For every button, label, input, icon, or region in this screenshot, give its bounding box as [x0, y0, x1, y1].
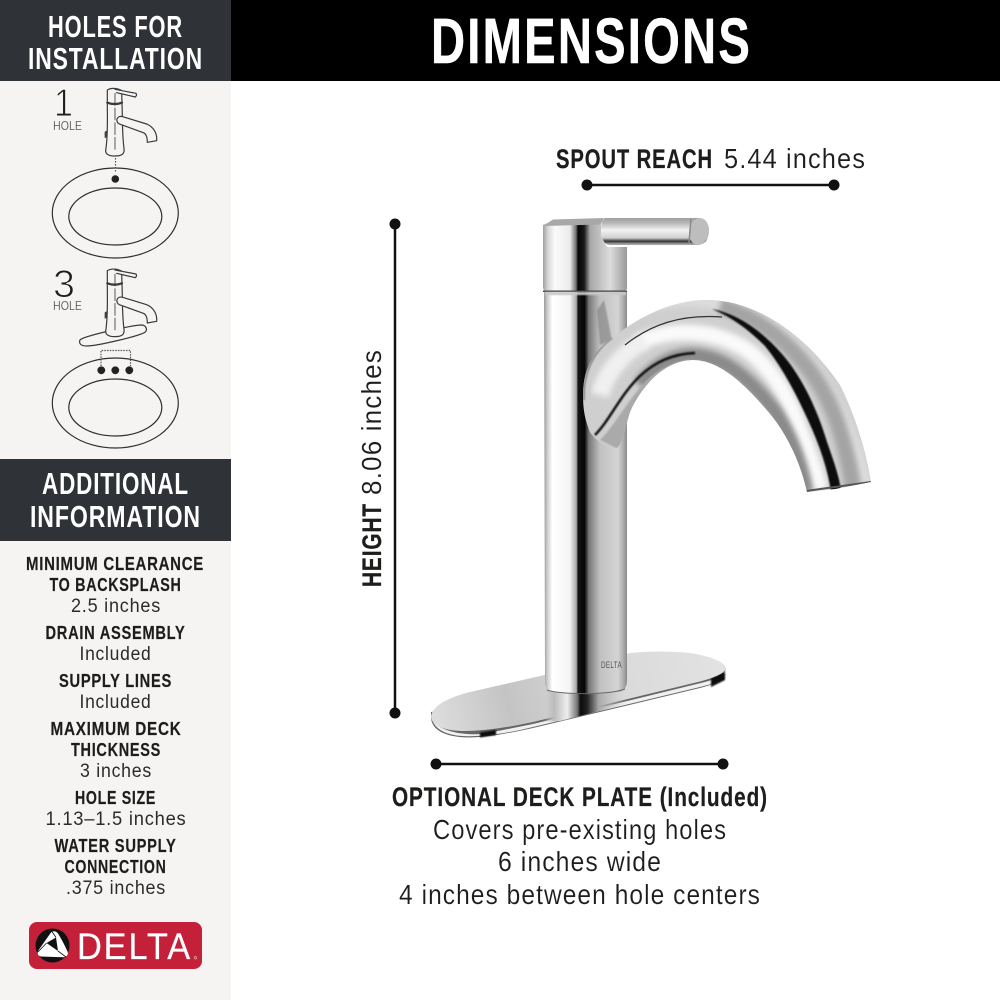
title banner: DIMENSIONS	[431, 5, 752, 77]
text block: supply lines: Included	[80, 692, 152, 713]
lower reflection line	[595, 353, 695, 435]
text block: optional deck plate: 4 inches between hole centers	[399, 879, 761, 910]
text block: maximum deck thickness: 3 inches	[80, 761, 152, 782]
image: chrome faucet	[431, 217, 880, 738]
faucet body	[544, 292, 627, 694]
heading: additional information	[0, 459, 231, 541]
text block: optional deck plate: 6 inches wide	[498, 846, 662, 877]
icon: sink single hole	[52, 158, 178, 258]
main dark stripe	[712, 309, 841, 492]
dimension: height: 8.06 inches	[356, 349, 387, 495]
text block: drain assembly: Included	[80, 644, 152, 665]
text block: hole size	[46, 787, 186, 830]
text block: drain assembly: DRAIN ASSEMBLY	[46, 622, 186, 643]
grey shoulder next to the dark stripe	[720, 306, 853, 490]
label: 1 hole: HOLE	[53, 119, 82, 133]
label: 1 hole: 1	[54, 82, 73, 125]
text block: minimum clearance: 2.5 inches	[71, 596, 161, 617]
text block: hole size: 1.13–1.5 inches	[46, 809, 186, 830]
text block: minimum clearance: TO BACKSPLASH	[50, 574, 182, 595]
dimension: spout reach: 5.44 inches	[724, 143, 866, 174]
heading: holes for installation: HOLES FOR	[48, 9, 183, 44]
lever handle	[601, 217, 711, 246]
text block: optional deck plate	[392, 782, 768, 910]
text block: maximum deck thickness	[50, 718, 182, 782]
heading: additional information: ADDITIONAL	[42, 466, 189, 501]
outer edge band	[670, 300, 870, 482]
text block: minimum clearance: MINIMUM CLEARANCE	[26, 553, 204, 574]
dimension: spout reach: SPOUT REACH	[556, 144, 713, 174]
icon: sink three holes	[52, 350, 178, 448]
text block: maximum deck thickness: MAXIMUM DECK	[50, 718, 182, 739]
mixer head	[543, 218, 627, 295]
spout nozzle	[806, 482, 871, 491]
sidebar background	[0, 0, 231, 1000]
text block: water supply connection: .375 inches	[66, 878, 166, 899]
heading: holes for installation	[0, 0, 231, 81]
text block: drain assembly	[46, 622, 186, 665]
label: 3 hole	[53, 263, 82, 313]
text block: maximum deck thickness: THICKNESS	[71, 739, 161, 760]
dimension: height: HEIGHT	[357, 503, 387, 587]
text block: water supply connection	[54, 835, 176, 899]
text block: minimum clearance	[26, 553, 204, 617]
text block: supply lines: SUPPLY LINES	[59, 670, 172, 691]
text block: supply lines	[59, 670, 172, 713]
deck plate	[431, 652, 726, 738]
heading: additional information: INFORMATION	[30, 499, 201, 534]
panel: 1 hole installation	[52, 82, 178, 258]
label: 3 hole: 3	[53, 263, 75, 306]
inner white highlight	[640, 333, 820, 490]
logo: Delta: DELTA	[77, 926, 192, 967]
icon: faucet with deck plate	[80, 269, 157, 346]
dimension: height	[356, 218, 400, 718]
text block: hole size: HOLE SIZE	[75, 787, 156, 808]
label: 1 hole	[53, 82, 82, 133]
text block: optional deck plate: OPTIONAL DECK PLATE (Included)	[392, 782, 768, 812]
heading: holes for installation: INSTALLATION	[28, 41, 203, 76]
dimension: spout reach	[556, 143, 866, 190]
grey inner edge	[640, 355, 806, 492]
panel: 3 hole installation	[52, 263, 178, 448]
faucet body: DELTA	[601, 660, 622, 671]
logo: Delta	[29, 922, 202, 969]
outer left edge	[584, 338, 612, 400]
text block: optional deck plate: Covers pre-existing holes	[433, 814, 727, 845]
text block: water supply connection: WATER SUPPLY	[54, 835, 176, 856]
upper reflection line	[625, 317, 722, 345]
spout	[583, 300, 871, 492]
label: 3 hole: HOLE	[53, 299, 82, 313]
text block: water supply connection: CONNECTION	[64, 856, 166, 877]
dimension: deck plate width	[430, 758, 728, 770]
title banner	[231, 0, 1000, 81]
icon: faucet single hole	[105, 88, 157, 156]
